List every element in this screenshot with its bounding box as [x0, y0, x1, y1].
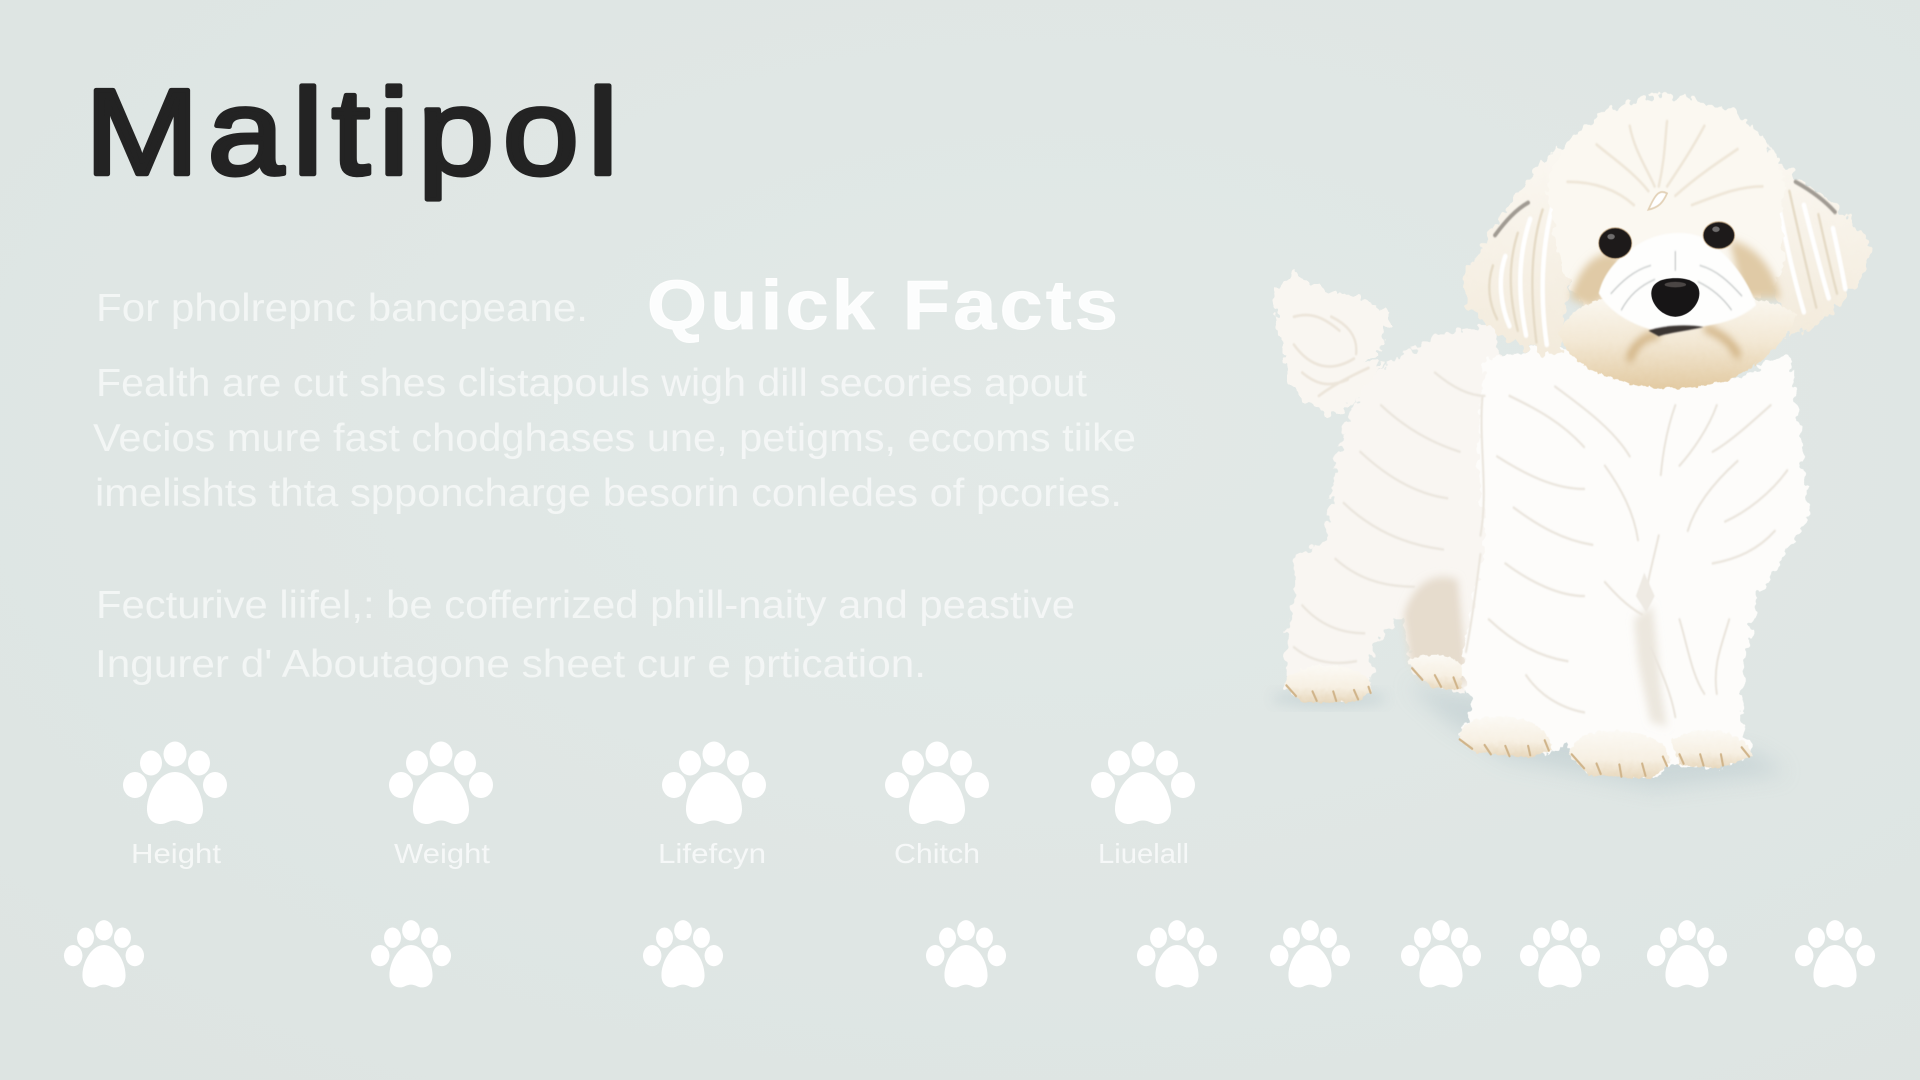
icon: small paw 3 — [643, 920, 723, 987]
eye left — [1599, 228, 1632, 259]
decorative paw row — [64, 920, 1875, 987]
icon: small paw 7 — [1401, 920, 1481, 987]
front paw right — [1671, 730, 1753, 768]
text block: first paragraph: Fealth are cut shes clistapouls wigh dill secories apout — [96, 362, 1087, 405]
text block: first paragraph — [93, 362, 1136, 515]
eye right — [1703, 222, 1735, 249]
inner leg gap — [1634, 605, 1667, 726]
left ear — [1464, 144, 1592, 356]
label: liuelall: Liuelall — [1098, 838, 1189, 869]
chest and front legs — [1460, 345, 1808, 778]
top of head — [1547, 96, 1783, 317]
text block: second paragraph: Ingurer d' Aboutagone sheet cur e prtication. — [95, 643, 926, 686]
icon: small paw 4 — [926, 920, 1006, 987]
label: height: Height — [131, 838, 221, 869]
mouth — [1648, 325, 1704, 336]
icon: small paw 1 — [64, 920, 144, 987]
body fur strokes — [1294, 373, 1787, 717]
icon: paw for weight — [389, 742, 493, 824]
icon: small paw 6 — [1270, 920, 1350, 987]
label: lifecycle: Lifefcyn — [658, 838, 766, 869]
rear inner leg shade — [1404, 577, 1468, 684]
tan face patches — [1570, 240, 1781, 307]
title: Maltipol — [85, 65, 618, 200]
icon: paw for chitch — [885, 742, 989, 824]
beard shading — [1630, 328, 1738, 359]
text block: second paragraph — [95, 584, 1075, 686]
heading: quick facts: Quick Facts — [647, 265, 1118, 344]
rear paw left — [1285, 665, 1372, 702]
icon: paw for lifecycle — [662, 742, 766, 824]
right ear — [1750, 149, 1870, 338]
chest ruff tuft — [1636, 573, 1655, 612]
icon: small paw 5 — [1137, 920, 1217, 987]
icon: small paw 8 — [1520, 920, 1600, 987]
label: weight: Weight — [394, 838, 490, 869]
icon: small paw 9 — [1647, 920, 1727, 987]
illustration: white fluffy dog — [1271, 96, 1870, 789]
ground shadow — [1271, 684, 1787, 789]
tail — [1271, 272, 1391, 417]
rear body — [1284, 324, 1530, 698]
icon: paw for height — [123, 742, 227, 824]
label: chitch: Chitch — [894, 838, 980, 869]
white snout — [1599, 233, 1756, 331]
rear paw right — [1408, 655, 1462, 690]
nose — [1651, 278, 1699, 317]
snout fur strokes — [1611, 252, 1742, 310]
head — [1464, 96, 1870, 388]
text block: second paragraph: Fecturive liifel,: be cofferrized phill-naity and peastive — [96, 584, 1075, 627]
front paw left — [1459, 717, 1552, 758]
text block: first paragraph: Vecios mure fast chodghases une, petigms, eccoms tiike — [93, 417, 1136, 460]
icon: small paw 10 — [1795, 920, 1875, 987]
icon: small paw 2 — [371, 920, 451, 987]
text block: first paragraph: imelishts thta spponcharge besorin conledes of pcories. — [95, 472, 1122, 515]
front paw middle — [1569, 731, 1670, 778]
fact row: labelled paw icons — [123, 742, 1195, 869]
intro line: For pholrepnc bancpeane. — [96, 287, 588, 330]
beard — [1559, 296, 1796, 388]
icon: paw for liuelall — [1091, 742, 1195, 824]
